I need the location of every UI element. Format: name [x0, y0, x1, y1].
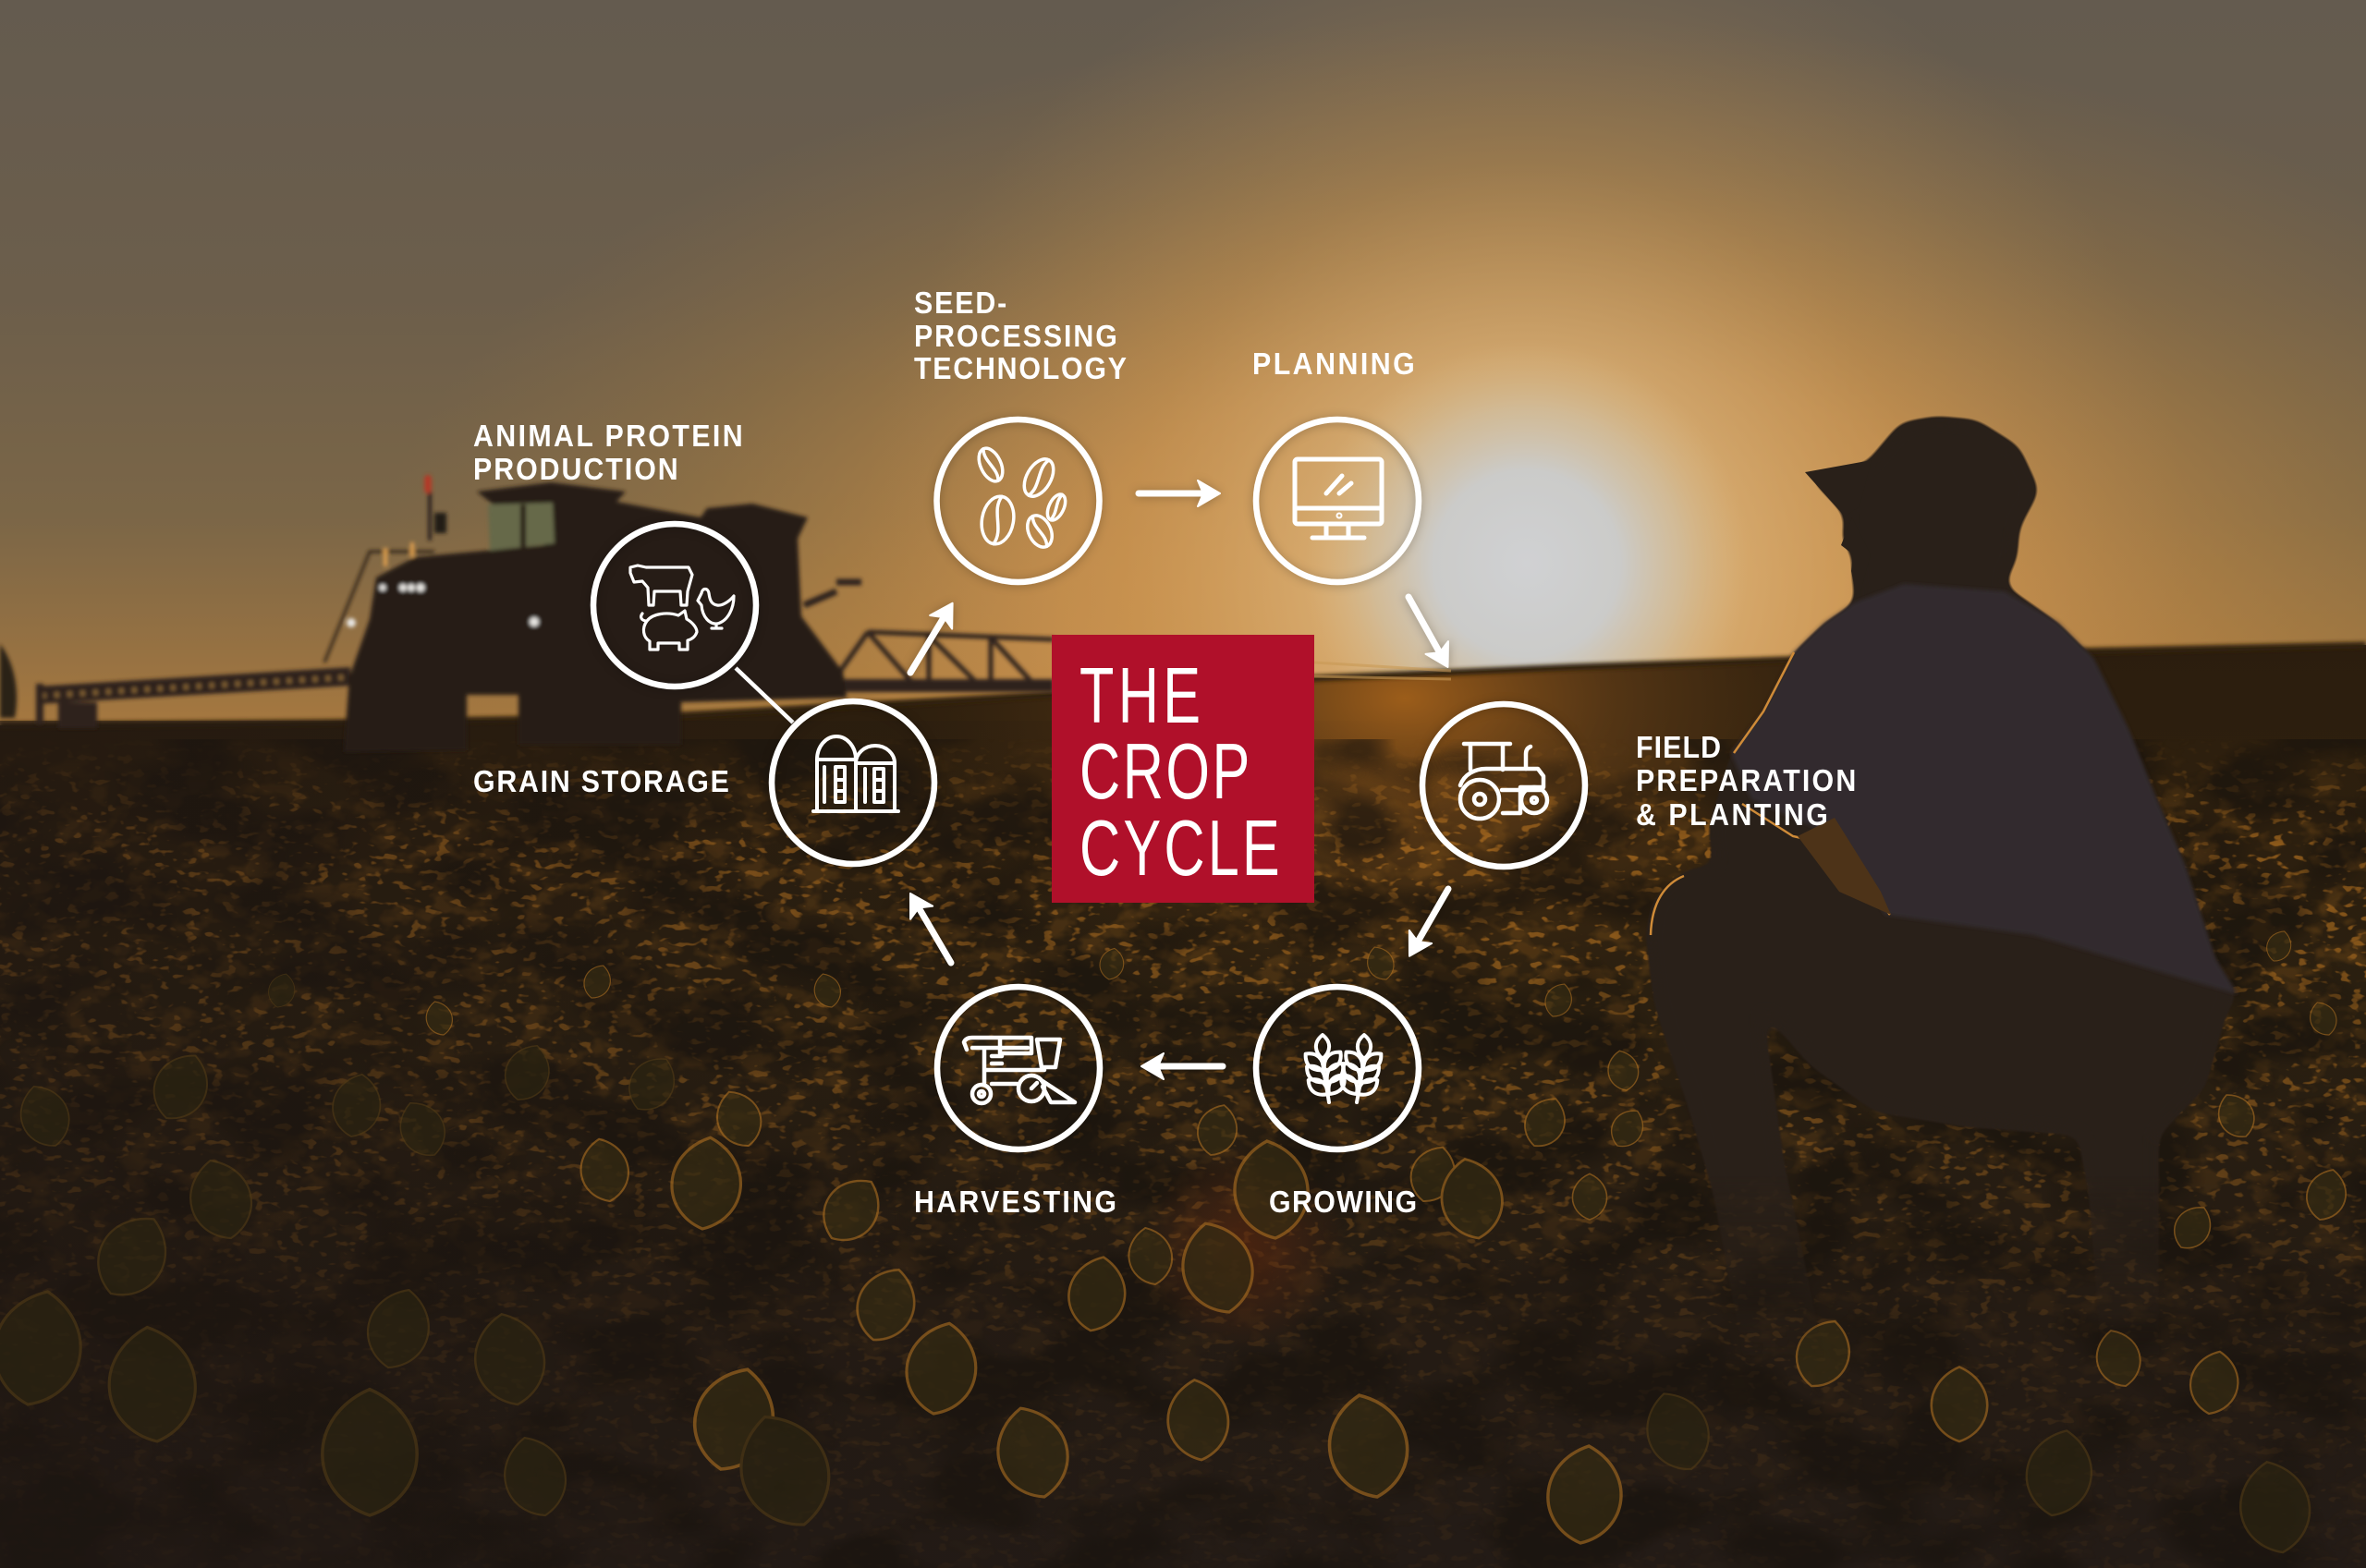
- node: planning: [1252, 346, 1419, 582]
- node: seed-processing technology: [914, 286, 1127, 582]
- title text: CROP: [1079, 727, 1250, 815]
- mid-ground leaves: [0, 928, 2352, 1558]
- title text: THE: [1079, 651, 1201, 739]
- node: harvesting: [914, 987, 1116, 1219]
- label: [473, 419, 743, 486]
- label: PLANNING: [1252, 346, 1415, 381]
- arrow: growing to harvesting: [1141, 1053, 1223, 1079]
- sunset glow: [0, 0, 2366, 739]
- icon: tractor: [1460, 744, 1547, 819]
- label: PREPARATION: [1636, 763, 1856, 797]
- title text: [1079, 651, 1280, 892]
- label: [914, 286, 1127, 385]
- label: GROWING: [1269, 1185, 1417, 1219]
- arrow: grain storage to seed processing: [899, 596, 964, 679]
- circle: [772, 701, 934, 864]
- distant tree: [0, 644, 17, 718]
- circle: [1256, 419, 1419, 582]
- label: PRODUCTION: [473, 452, 678, 486]
- headlights: [347, 584, 539, 627]
- far boom rail: [1314, 662, 1451, 679]
- sprayer booms: [36, 582, 1054, 728]
- red panel: [1052, 635, 1314, 903]
- circle: [937, 987, 1100, 1149]
- circle: [937, 419, 1100, 582]
- node: growing: [1256, 987, 1419, 1219]
- title block: the crop cycle: [1052, 635, 1314, 903]
- arrow: harvesting to grain storage: [899, 887, 962, 969]
- arrow: field preparation to growing: [1398, 882, 1459, 963]
- label: GRAIN STORAGE: [473, 764, 729, 798]
- label: [1636, 730, 1856, 832]
- arrows ring: [899, 480, 1459, 1079]
- arrow: planning to field preparation: [1397, 590, 1459, 674]
- circle: [1422, 704, 1585, 867]
- icon: grain silos: [813, 736, 898, 811]
- cap brim and face: [1805, 461, 1867, 584]
- circle: [1256, 987, 1419, 1149]
- node: field preparation and planting: [1422, 704, 1856, 867]
- machine body: [344, 482, 847, 752]
- connector: animal protein to grain storage: [736, 668, 793, 723]
- icon: computer monitor: [1295, 459, 1382, 538]
- cab window: [488, 503, 555, 551]
- farmer silhouette: [1645, 416, 2238, 1386]
- circle: [593, 524, 756, 687]
- crop cycle diagram: [473, 286, 1856, 1219]
- sky: [0, 0, 2366, 739]
- gap between arm and thigh: [1798, 818, 1891, 915]
- rim light: [1651, 652, 1890, 935]
- icon: cow, pig and chicken: [630, 565, 734, 650]
- icon: seeds: [974, 444, 1069, 551]
- label: HARVESTING: [914, 1185, 1116, 1219]
- node: animal protein production: [473, 419, 756, 687]
- icon: wheat ears: [1301, 1035, 1385, 1102]
- icon: combine harvester: [964, 1038, 1075, 1103]
- label: PROCESSING: [914, 319, 1117, 353]
- title text: CYCLE: [1079, 804, 1280, 892]
- field: [0, 645, 2366, 1568]
- shirt: [1731, 584, 2238, 994]
- label: SEED-: [914, 286, 1006, 320]
- label: ANIMAL PROTEIN: [473, 419, 743, 453]
- arrow: seed processing to planning: [1139, 480, 1220, 506]
- label: FIELD: [1636, 730, 1721, 764]
- label: TECHNOLOGY: [914, 351, 1127, 385]
- label: & PLANTING: [1636, 797, 1828, 832]
- beacon and handrail: [324, 479, 446, 662]
- sun: [1305, 342, 1749, 785]
- node: grain storage: [473, 701, 934, 864]
- tractor sprayer silhouette: [0, 479, 1054, 752]
